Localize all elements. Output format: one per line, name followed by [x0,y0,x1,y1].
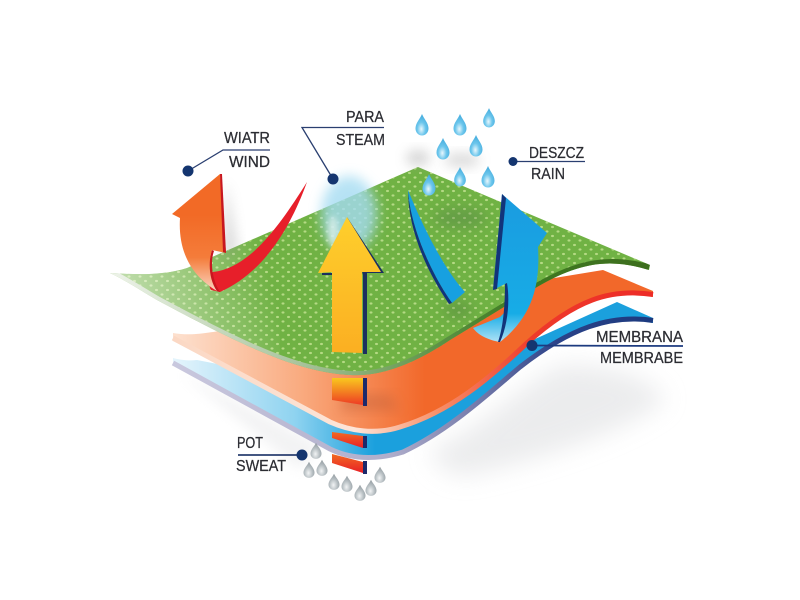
arrow: vapour up [318,217,384,354]
arrow shadows on fabric [222,150,486,318]
rain drops [416,108,495,196]
arrow: rain [408,190,547,342]
label: wind: WIATR [224,130,270,147]
layer shadow under green [340,395,400,410]
label: rain: DESZCZ [529,145,584,162]
orange curved arrow [172,174,226,291]
label: membrane: MEMBRANA [596,329,684,346]
blue curved arrow [473,194,547,342]
segment through blue layer [332,432,367,448]
layer: blue fabric [173,302,653,458]
segment through sweat gap [332,454,367,474]
label: wind [182,130,270,176]
label: wind: WIND [229,154,270,171]
label: steam [302,109,385,184]
label: membrane: MEMBRABE [600,350,683,367]
blue swoosh [408,190,465,303]
sweat drops [303,443,386,501]
ground shadow [180,365,665,475]
segment through orange layer [332,378,367,406]
steam cloud [321,176,377,252]
label: sweat: SWEAT [236,458,286,475]
label: rain [508,145,585,183]
arrow: wind [172,174,307,292]
label: sweat [236,435,308,475]
layer: green perforated fabric [100,160,660,380]
red swoosh [209,182,307,292]
arrow segments: yellow to red through layers [332,378,367,474]
label: steam: PARA [346,109,385,126]
label: steam: STEAM [336,132,385,149]
label: membrane [526,329,684,367]
label: rain: RAIN [531,166,565,183]
layer: orange fabric [173,270,653,432]
label: sweat: POT [237,435,263,452]
